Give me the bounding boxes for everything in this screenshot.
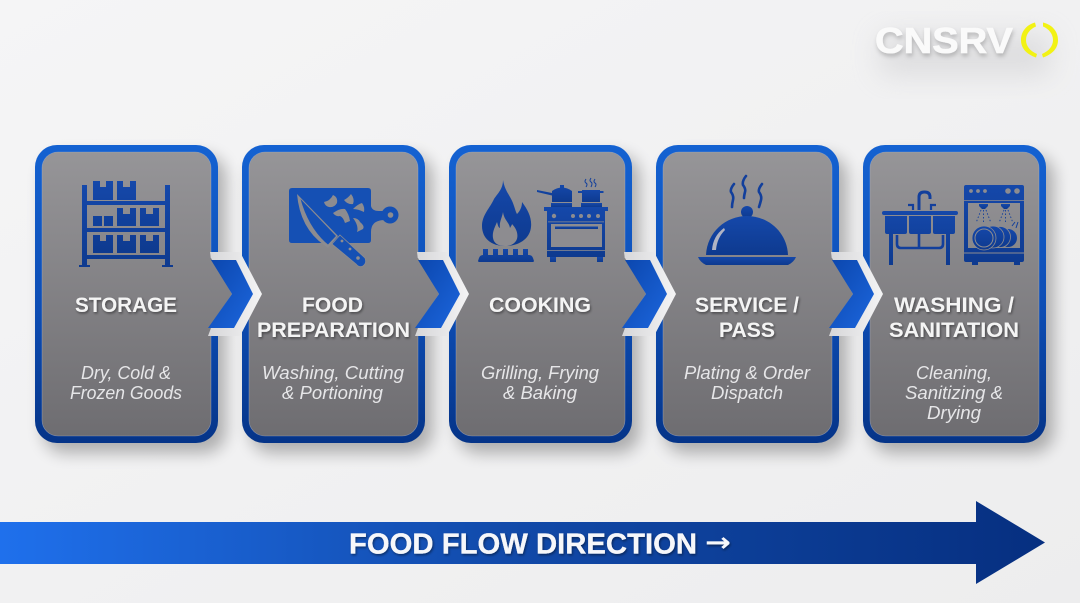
heading: service / pass (695, 294, 799, 342)
arrow: cooking to service (621, 252, 676, 336)
card: service / pass (656, 145, 847, 453)
heading: food preparation: FOOD (302, 294, 363, 317)
arrow: storage to food preparation (207, 252, 262, 336)
logo: CNSRV: CNSRV (875, 20, 1013, 61)
text: storage description: Dry, Cold & (81, 363, 171, 383)
text: service description: Dispatch (711, 383, 783, 403)
label: food flow direction: FOOD FLOW DIRECTION (349, 528, 697, 560)
icon: cutting board and knife (289, 188, 398, 267)
text: cooking description: Grilling, Frying (481, 363, 599, 383)
text: storage description: Frozen Goods (70, 383, 182, 403)
label: food flow direction: → (705, 528, 731, 558)
arrow: food preparation to cooking (414, 252, 469, 336)
arrow: food flow direction (0, 501, 1045, 584)
icon: serving cloche (698, 176, 796, 265)
icon: stove with pots (537, 178, 608, 262)
text: food preparation description: & Portioning (282, 383, 383, 403)
text: food preparation description (262, 363, 404, 403)
icon: storage shelves with boxes (79, 181, 173, 267)
card: cooking (449, 145, 640, 453)
icon: dishwasher (964, 185, 1024, 265)
heading: food preparation (257, 294, 410, 342)
heading: storage: STORAGE (75, 294, 177, 317)
text: washing description: Cleaning, (916, 363, 992, 383)
heading: service / pass: SERVICE / (695, 294, 799, 317)
heading: washing / sanitation: WASHING / (894, 294, 1014, 317)
text: cooking description (481, 363, 599, 403)
text: cooking description: & Baking (503, 383, 577, 403)
card: washing / sanitation (863, 145, 1054, 453)
heading: food preparation: PREPARATION (257, 319, 410, 342)
arrow: service to washing (828, 252, 883, 336)
icon: flame and burner (478, 180, 534, 262)
card: storage (35, 145, 226, 453)
text: service description: Plating & Order (684, 363, 811, 383)
heading: washing / sanitation: SANITATION (889, 319, 1019, 342)
heading: cooking: COOKING (489, 294, 591, 317)
text: washing description: Sanitizing & (905, 383, 1003, 403)
card: food preparation (242, 145, 433, 453)
text: service description (684, 363, 811, 403)
icon: three compartment sink (882, 192, 958, 265)
logo: CNSRV (875, 20, 1058, 61)
heading: washing / sanitation (889, 294, 1019, 342)
text: washing description (905, 363, 1003, 423)
text: washing description: Drying (927, 403, 981, 423)
text: storage description (70, 363, 182, 403)
text: food preparation description: Washing, Cutting (262, 363, 404, 383)
heading: service / pass: PASS (719, 319, 775, 342)
